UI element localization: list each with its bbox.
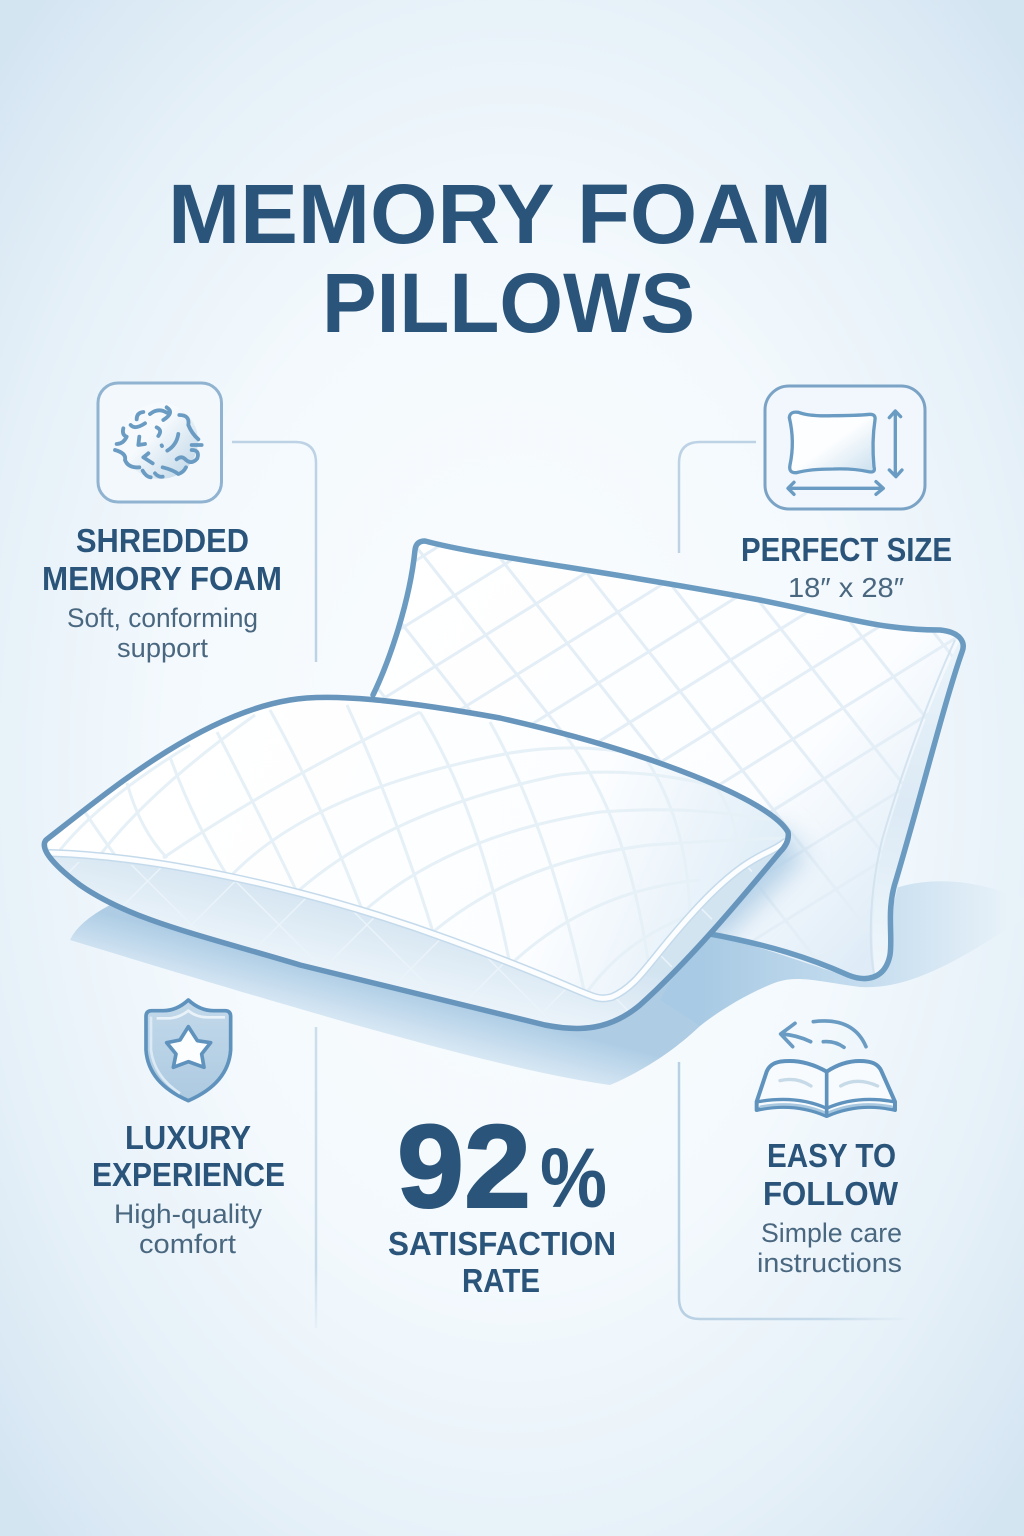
stat: 92% satisfaction rate [388, 1101, 616, 1299]
underside quilting [60, 850, 770, 1028]
text: perfect size: 18″ x 28″ [788, 572, 904, 603]
quilting lines [59, 704, 701, 991]
stat: 92% satisfaction rate: % [540, 1131, 607, 1225]
text: luxury experience: EXPERIENCE [92, 1156, 285, 1193]
side gusset [873, 642, 960, 973]
icon: open book [757, 1021, 895, 1116]
text: perfect size [741, 531, 952, 603]
icon: perfect size [765, 386, 925, 509]
panel: pillow illustration [0, 530, 1024, 1085]
text: easy to follow: instructions [757, 1248, 902, 1278]
text: luxury experience: LUXURY [125, 1119, 251, 1156]
floor shadow [70, 881, 1024, 1085]
connector: shredded foam [232, 442, 316, 662]
icon: shredded foam [98, 383, 222, 502]
back pillow [370, 538, 966, 982]
seam piping [50, 842, 785, 998]
title [168, 167, 832, 350]
text: shredded memory foam: support [117, 633, 209, 663]
title: PILLOWS [322, 256, 695, 350]
text: easy to follow [757, 1137, 902, 1278]
icon: shield with star [146, 1000, 231, 1101]
text: easy to follow: Simple care [761, 1218, 902, 1248]
quilting [378, 546, 957, 970]
text: easy to follow: FOLLOW [763, 1175, 899, 1212]
title: MEMORY FOAM [168, 167, 832, 261]
text: shredded memory foam [42, 522, 282, 663]
connector: perfect size [679, 442, 756, 553]
text: luxury experience [92, 1119, 285, 1259]
text: easy to follow: EASY TO [767, 1137, 896, 1174]
shade from front pillow [700, 840, 790, 930]
text: shredded memory foam: SHREDDED [76, 522, 249, 559]
top face [46, 697, 790, 998]
text: luxury experience: High-quality [114, 1199, 263, 1229]
text: shredded memory foam: Soft, conforming [67, 603, 258, 633]
text: perfect size: PERFECT SIZE [741, 531, 952, 568]
text: luxury experience: comfort [139, 1229, 237, 1259]
connector: easy to follow [679, 1062, 910, 1319]
front pillow outline [44, 697, 788, 1028]
stat: 92% satisfaction rate: RATE [462, 1262, 540, 1299]
text: shredded memory foam: MEMORY FOAM [42, 560, 282, 597]
stat: 92% satisfaction rate: 92 [397, 1101, 531, 1233]
stat: 92% satisfaction rate: SATISFACTION [388, 1225, 616, 1262]
front pillow [44, 697, 790, 1028]
connector: luxury [315, 1027, 317, 1328]
